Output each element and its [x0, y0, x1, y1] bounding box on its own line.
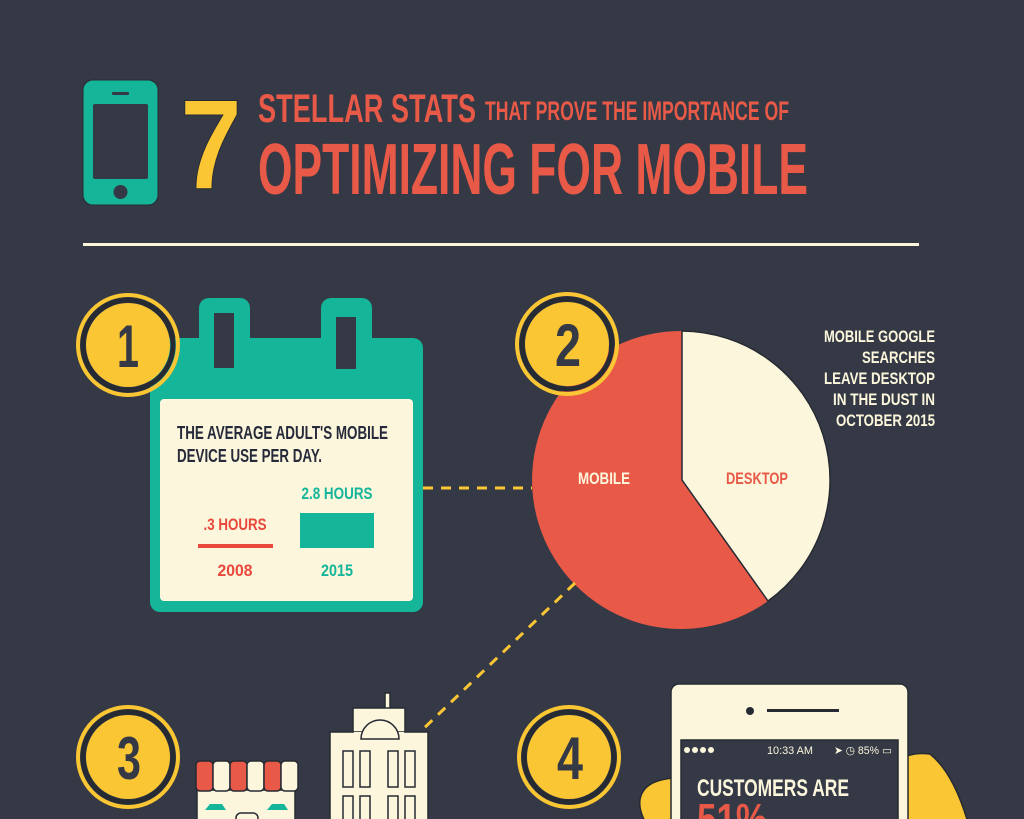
arrow: dashed connector 2-3 [420, 583, 575, 732]
bar chart: mobile hours: 2015 [321, 561, 353, 580]
text: stat 1 description: THE AVERAGE ADULT'S MOBILE [177, 423, 388, 443]
panel: stat 1 calendar [150, 298, 423, 612]
title number 7: 7 [180, 74, 242, 217]
icon: store [196, 761, 298, 819]
badge: 1: 1 [117, 313, 139, 380]
text: stat 4 headline [697, 775, 849, 819]
text: stat 2 caption: SEARCHES [862, 348, 935, 367]
icon: hand holding phone: ➤ ◷ 85% ▭ [834, 745, 892, 757]
pie chart: mobile vs desktop [532, 331, 830, 629]
bar chart: mobile hours: .3 HOURS [204, 515, 266, 534]
text: stat 2 caption: MOBILE GOOGLE [824, 327, 935, 346]
pie chart: mobile vs desktop: MOBILE [578, 469, 630, 488]
badge: 4: 4 [557, 725, 583, 792]
arrow: dashed connector 1-2 [423, 486, 532, 490]
badge: 2: 2 [555, 312, 581, 379]
text: stat 2 caption: LEAVE DESKTOP [824, 369, 935, 388]
bar chart: mobile hours [198, 484, 374, 580]
badge: 3 [78, 707, 178, 807]
text: stat 4 headline: CUSTOMERS ARE [697, 775, 849, 802]
title line 1: STELLAR STATS [258, 87, 476, 131]
title line 1 [258, 87, 789, 131]
pie chart: mobile vs desktop: DESKTOP [726, 469, 788, 488]
icon: hand holding phone: 10:33 AM [767, 745, 813, 757]
bar chart: mobile hours: 2.8 HOURS [302, 484, 372, 503]
text: stat 1 description: DEVICE USE PER DAY. [177, 446, 322, 466]
badge: 3: 3 [117, 725, 141, 792]
badge: 2 [517, 294, 617, 394]
icon: hand holding phone [640, 684, 970, 819]
badge: 1 [78, 295, 178, 395]
bar chart: mobile hours: 2008 [218, 561, 252, 580]
text: stat 2 caption [824, 327, 935, 430]
text: stat 2 caption: OCTOBER 2015 [836, 411, 935, 430]
text: stat 2 caption: IN THE DUST IN [833, 390, 935, 409]
text: stat 1 description [177, 423, 388, 466]
icon: phone [83, 80, 158, 205]
badge: 4 [519, 707, 619, 807]
title line 1: THAT PROVE THE IMPORTANCE OF [485, 96, 789, 126]
icon: building [330, 693, 428, 819]
